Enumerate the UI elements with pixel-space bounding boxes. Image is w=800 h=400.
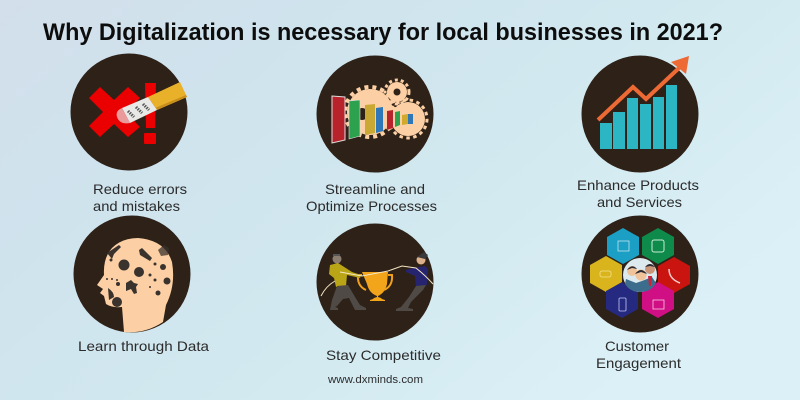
panel: customer engagement: Engagement [596, 355, 681, 371]
label: Reduce errors [93, 181, 187, 197]
title: Why Digitalization is necessary for local businesses in 2021? [43, 19, 723, 46]
panel: enhance products [577, 56, 699, 210]
panel: streamline [306, 56, 437, 214]
panel: customer engagement [582, 216, 698, 371]
panel: learn through data [74, 216, 209, 354]
label: Stay Competitive [326, 347, 441, 363]
icon: eraser over error marks [70, 54, 188, 170]
icon: tug of war over trophy [316, 224, 434, 340]
icon: gears and bars [316, 56, 434, 172]
label: Streamline and [325, 181, 425, 197]
icon: rising bar chart [582, 56, 698, 172]
panel: reduce errors [70, 54, 188, 214]
label: Learn through Data [78, 338, 209, 354]
icon: hexagon channels with people [582, 216, 698, 332]
panel: reduce errors: and mistakes [93, 198, 180, 214]
label: Customer [605, 338, 669, 354]
panel: enhance products: and Services [597, 194, 682, 210]
panel: streamline: Optimize Processes [306, 198, 437, 214]
label: Enhance Products [577, 177, 699, 193]
panel: stay competitive [316, 224, 441, 363]
website url: www.dxminds.com [327, 374, 423, 386]
icon: head with data symbols [74, 216, 190, 332]
